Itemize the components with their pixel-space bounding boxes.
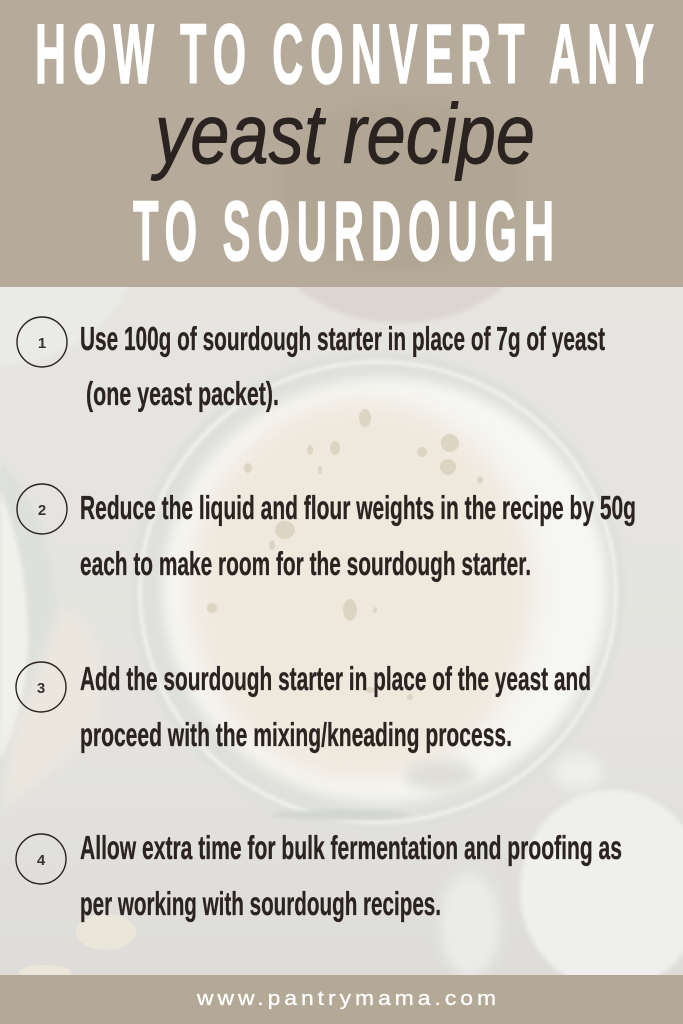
number badge 4: 4 [37, 852, 46, 869]
title [35, 7, 661, 278]
footer band [0, 975, 683, 1024]
step 4 [16, 829, 622, 922]
step 3 text [80, 660, 591, 753]
step 1 text: (one yeast packet). [86, 375, 279, 412]
website url: www.pantrymama.com [196, 988, 500, 1010]
number badge 4 [16, 834, 66, 884]
step 1 text [80, 320, 605, 412]
step 4 text [80, 829, 622, 922]
number badge 2: 2 [38, 502, 46, 519]
dough crumbs [19, 914, 136, 979]
title script line: yeast recipe [151, 87, 535, 181]
step 2 text [80, 489, 636, 582]
step 3 [16, 660, 591, 753]
step 1 [17, 317, 605, 412]
left glass jar [0, 460, 102, 810]
number badge 1 [17, 317, 67, 367]
flour mound [440, 754, 683, 990]
starter bubbles [207, 409, 483, 700]
number badge 3 [16, 662, 66, 712]
header band [0, 0, 683, 287]
step 4 text: per working with sourdough recipes. [80, 885, 441, 922]
number badge 3: 3 [37, 680, 45, 697]
number badge 2 [17, 484, 67, 534]
step 2 [17, 484, 636, 582]
number badge 1: 1 [38, 335, 46, 352]
